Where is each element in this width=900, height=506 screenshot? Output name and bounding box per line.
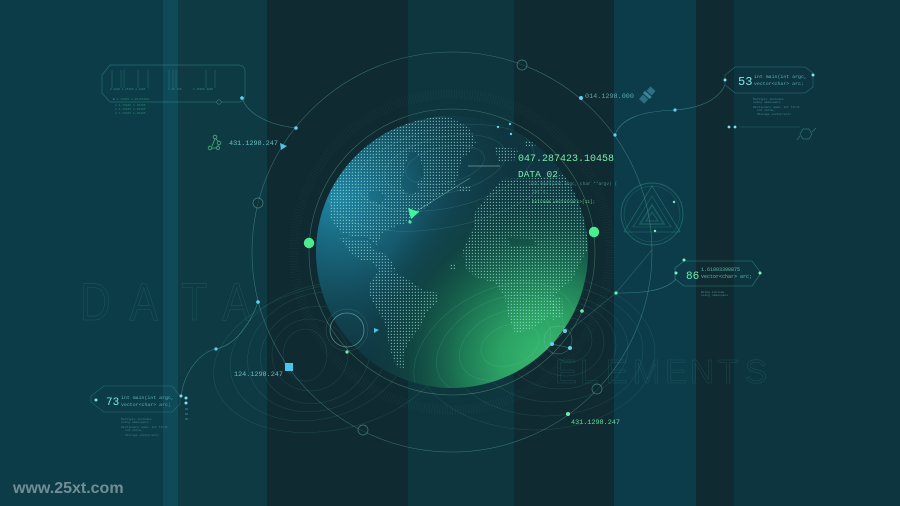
coordinate labels: 431.1298.247 (229, 140, 278, 148)
panel note (121, 417, 168, 437)
panel note (701, 290, 728, 297)
panel note: using namespace; (753, 100, 782, 104)
contour lines right (415, 274, 655, 430)
panel note: Bitop include (701, 290, 725, 294)
satellite icon (638, 86, 656, 104)
code lines (754, 74, 807, 87)
target ring lower left (326, 309, 368, 351)
code lines: 1.61803398875 (701, 267, 740, 273)
panel nodes (674, 258, 762, 274)
Madagascar (550, 296, 563, 320)
list text: ■ 1.78945 1.25165498 (113, 98, 149, 101)
watermark: www.25xt.com (12, 480, 124, 497)
panel nodes (724, 74, 814, 128)
green markers on ring (304, 227, 599, 248)
South America (370, 272, 439, 368)
globe sphere (316, 116, 588, 388)
coordinate labels (229, 93, 634, 427)
panel note (753, 97, 800, 116)
data readout (518, 154, 617, 205)
contour lines left (200, 261, 460, 453)
panel note: using namespace (701, 293, 728, 297)
barcode captions: 1.25 165 (168, 88, 182, 91)
code lines: vector<char> arc; (754, 81, 804, 87)
network icon (208, 135, 221, 150)
blue square marker (285, 363, 293, 371)
blue triangle pointers (280, 143, 379, 333)
hexagon frame (91, 386, 180, 412)
panel frame (102, 65, 245, 102)
panel note: Dictionary node, int first (121, 425, 168, 429)
code lines: int main(int argc, (121, 395, 174, 401)
coordinate labels: 124.1298.247 (234, 371, 283, 379)
code lines: vector<char> arc; (701, 274, 752, 280)
Caribbean islet (450, 264, 455, 269)
frame node (217, 100, 221, 104)
hexagon frame (675, 261, 761, 286)
barcode captions: 0.1085 1.25165 4 1895 (110, 88, 146, 91)
panel note: int value; (125, 428, 143, 432)
globe (316, 116, 588, 388)
Central America (340, 238, 396, 273)
constellation near Africa tip (544, 326, 572, 354)
panel note: Multiple includes (121, 417, 152, 421)
panel note: Dictionary node, int first (753, 105, 800, 109)
Africa and Eurasia (463, 170, 595, 333)
Arctic island (526, 142, 536, 146)
data readout: int x; (532, 190, 548, 195)
panel nodes (94, 394, 188, 404)
triangle emblem (621, 183, 683, 245)
data readout: DATA 02 (518, 169, 558, 180)
data readout: int main(int argc, char **argv) { (530, 182, 617, 187)
North America (330, 112, 476, 245)
list text: 1 1.78945 1.25165 (115, 104, 146, 107)
panel: 73 readout (91, 386, 188, 437)
ghost word DATA: DATA (80, 274, 251, 332)
code lines: vector<char> arc; (121, 402, 171, 408)
panel: top-left barcode (102, 65, 245, 115)
dotted continents (330, 112, 595, 368)
coordinate labels: 014.1298.000 (585, 93, 634, 101)
radial tick ring (294, 94, 610, 410)
outer orbit ring (252, 52, 652, 452)
panel note: Storage vector<arc> (757, 112, 791, 116)
barcode captions (110, 88, 213, 91)
code lines (121, 395, 174, 408)
British Isles (496, 148, 518, 161)
panel note: int value; (757, 108, 775, 112)
panel: 86 readout (674, 258, 762, 297)
orbit hollow nodes (253, 60, 602, 435)
Newfoundland (457, 186, 472, 191)
data readout: Estream vector<arc>[11]; (532, 200, 595, 205)
barcode captions: 1.25165 4895 (193, 88, 213, 91)
list text: 3 1.78945 1.25165 (115, 112, 146, 115)
inner orbit ring (309, 109, 595, 395)
marker on North America (408, 178, 470, 224)
side status squares (185, 408, 188, 420)
molecule icon (797, 128, 816, 140)
contour lines on globe (328, 116, 574, 388)
number: 73 (106, 397, 119, 409)
connector curves (181, 85, 725, 397)
number: 86 (686, 271, 699, 283)
pointer line (468, 165, 500, 167)
hexagon frame (725, 67, 813, 93)
panel note: Multiple includes (753, 97, 784, 101)
number: 53 (738, 75, 752, 89)
green nodes (345, 291, 618, 416)
ghost word ELEMENTS: ELEMENTS (555, 353, 767, 390)
code lines (701, 267, 752, 280)
blue nodes (214, 96, 677, 351)
coordinate labels: 431.1298.247 (571, 419, 620, 427)
code lines: int main(int argc, (754, 74, 807, 80)
status rule (740, 126, 800, 128)
panel: 53 readout (724, 67, 814, 128)
barcode lines (112, 70, 215, 88)
data readout: 047.287423.10458 (518, 154, 614, 165)
list text (113, 98, 149, 115)
list text: 2 1.78945 1.25165 (115, 108, 146, 111)
panel note: Storage vector<arc> (125, 433, 159, 437)
panel note: using namespace; (121, 420, 150, 424)
